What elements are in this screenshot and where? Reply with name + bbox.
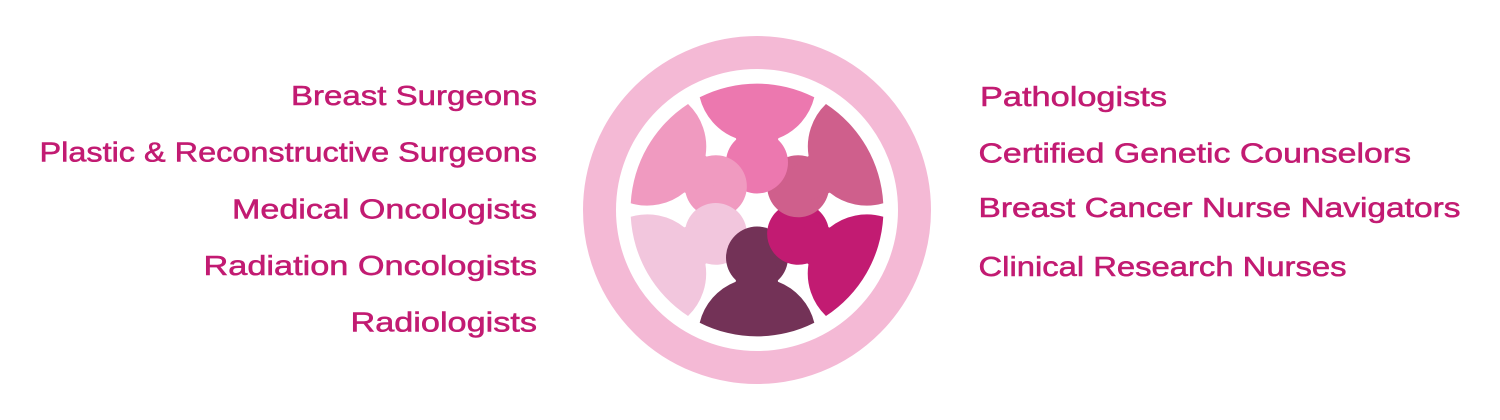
icon: person, upper right bbox=[743, 97, 895, 251]
icon: person, lower right bbox=[743, 169, 895, 323]
icon: person, top bbox=[700, 84, 814, 194]
label: Radiation Oncologists: Radiation Oncologists bbox=[204, 250, 537, 281]
icon: person, bottom bbox=[700, 226, 814, 336]
label: Medical Oncologists: Medical Oncologists bbox=[232, 193, 537, 224]
icon: person, upper left bbox=[619, 97, 771, 251]
label: Pathologists: Pathologists bbox=[980, 81, 1167, 112]
icon: overlap of lower left head over upper left head bbox=[696, 203, 735, 222]
label: Breast Surgeons: Breast Surgeons bbox=[291, 80, 537, 111]
label: Breast Cancer Nurse Navigators: Breast Cancer Nurse Navigators bbox=[978, 192, 1460, 223]
right list of specialists bbox=[978, 81, 1460, 282]
outer pink ring bbox=[600, 52, 914, 368]
left list of specialists bbox=[40, 80, 537, 338]
icon: person, lower left bbox=[619, 169, 771, 323]
label: Radiologists: Radiologists bbox=[350, 307, 537, 338]
label: Certified Genetic Counselors: Certified Genetic Counselors bbox=[978, 137, 1411, 168]
label: Plastic & Reconstructive Surgeons: Plastic & Reconstructive Surgeons bbox=[40, 137, 537, 168]
emblem: ring with six people bbox=[600, 52, 914, 368]
label: Clinical Research Nurses: Clinical Research Nurses bbox=[978, 251, 1346, 282]
